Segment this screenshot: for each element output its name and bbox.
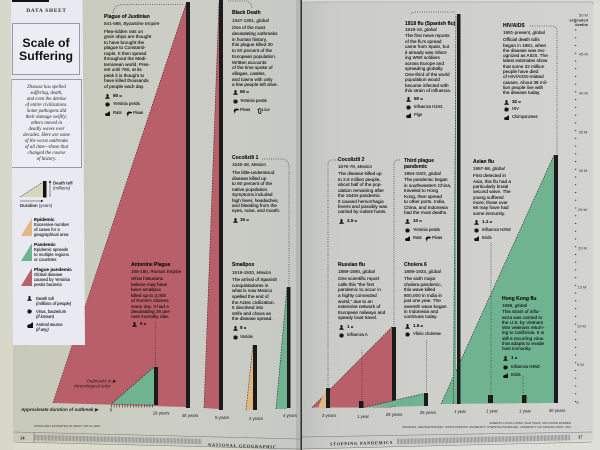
outbreak: Third plague pandemic: pandemic bbox=[404, 164, 427, 170]
duration labels: 16 years bbox=[153, 410, 169, 416]
legend: plague pandemic: Plague pandemic bbox=[34, 267, 72, 272]
outbreak: 1918 flu: Influenza H1N1 bbox=[414, 104, 443, 109]
outbreak: Cocoliztli 2: about half of the pop- bbox=[338, 182, 382, 187]
duration labels: 2 years bbox=[249, 416, 263, 421]
outbreak: Black Death: Fleas bbox=[240, 107, 250, 112]
outbreak: Cholera 6: 1.5 M bbox=[413, 323, 423, 328]
outbreak: Cholera 6: this wave killed bbox=[404, 287, 435, 292]
outbreak: Plague of Justinian bbox=[104, 14, 160, 117]
legend: epidemic: Epidemic bbox=[34, 217, 54, 222]
legend: how to read: Duration (years) bbox=[20, 203, 53, 208]
outbreak: Antonine Plague: Antonine Plague bbox=[131, 262, 170, 268]
outbreak: Black Death: and towns with only bbox=[232, 77, 272, 82]
outbreak: Black Death: One of the most bbox=[232, 25, 265, 30]
outbreak: Black Death: of the time spoke of bbox=[232, 65, 272, 70]
outbreak: HIV/AIDS: lion people live with bbox=[503, 85, 543, 90]
intro text: of the worst outbreaks bbox=[25, 139, 68, 144]
outbreak: Plague of Justinian: Yersinia pestis bbox=[113, 101, 140, 106]
outbreak: Cholera 6: The sixth major bbox=[404, 276, 436, 281]
outbreak: Russian flu: world," due to an bbox=[338, 299, 373, 304]
outbreak: Asian flu: more; those over bbox=[473, 200, 508, 205]
folio: right footer bbox=[302, 432, 592, 449]
y axis: estimated deaths: 5 M bbox=[577, 362, 584, 367]
outbreak: Third plague pandemic: 10 M bbox=[413, 218, 422, 223]
outbreak: HIV/AIDS: 1981-present, global bbox=[503, 30, 545, 35]
outbreak: Plague of Justinian: have killed thousands bbox=[104, 78, 149, 83]
outbreak: Cocoliztli 2: Cocoliztli 2 bbox=[338, 157, 364, 163]
outbreak: Smallpox: the disease spread. bbox=[232, 316, 273, 321]
outbreak: HIV/AIDS: Chimpanzees bbox=[512, 114, 538, 119]
outbreak: Cholera 6: just one year. The bbox=[404, 298, 441, 303]
outbreak: Smallpox: 8 M bbox=[240, 325, 246, 330]
outbreak: 1918 flu: this strain of influenza. bbox=[405, 88, 451, 93]
outbreak: Third plague pandemic: Yersinia pestis bbox=[413, 227, 440, 232]
y axis: estimated deaths: 30 M bbox=[578, 168, 587, 173]
y axis: estimated deaths: 40 M bbox=[579, 90, 588, 96]
outbreak: Asian flu: some immunity. bbox=[473, 211, 505, 216]
outbreak: Plague of Justinian: plague to Constanti- bbox=[104, 45, 146, 50]
folio: right footer: 37 bbox=[578, 434, 583, 440]
outbreak: Russian flu: 1889-1890, global bbox=[338, 269, 375, 274]
outbreak: Russian flu: calls this "the first bbox=[338, 282, 374, 287]
outbreak: Russian flu: European railways and bbox=[338, 310, 385, 315]
outbreak: HIV/AIDS: Official death tolls bbox=[503, 37, 540, 42]
outbreak: Russian flu: pandemic to occur in bbox=[338, 287, 381, 292]
triangle: Smallpox bbox=[246, 345, 257, 410]
legend: death toll icon: (millions of people) bbox=[36, 301, 71, 306]
outbreak: Russian flu: 1 M bbox=[347, 324, 353, 329]
outbreak: Russian flu: Russian flu bbox=[338, 262, 365, 268]
outbreak: Cocoliztli 2: ulation remaining after bbox=[338, 188, 384, 193]
outbreak: Cholera 6 bbox=[404, 262, 447, 337]
outbreak: Smallpox: strife and chaos as bbox=[232, 311, 271, 316]
outbreak: Hong Kong flu bbox=[502, 296, 544, 378]
triangle: Cocoliztli 2 bbox=[318, 388, 330, 408]
outbreak: Asian flu: 1957-58, global bbox=[473, 166, 505, 171]
outbreak: Antonine Plague: of Rome's citizens bbox=[131, 298, 169, 303]
intro text bbox=[11, 79, 82, 168]
legend: death toll icon: Death toll bbox=[36, 296, 54, 301]
outbreak: Plague of Justinian: ent until 750, at its bbox=[104, 67, 142, 72]
outbreak: Cocoliztli 2: 1576-78, Mexico bbox=[338, 164, 372, 169]
outbreak: Asian flu: Birds bbox=[482, 235, 492, 240]
outbreak: Cocoliztli 2: 2.5 M bbox=[347, 218, 357, 223]
triangle: Antonine Plague bbox=[112, 367, 158, 405]
duration labels: 4 years bbox=[283, 413, 297, 418]
outbreak: Black Death bbox=[232, 10, 278, 114]
outbreak: Black Death: Black Death bbox=[232, 10, 261, 16]
outbreak: Plague of Justinian: Plague of Justinian bbox=[104, 14, 150, 20]
outbreak: Plague of Justinian: grain ships are thought bbox=[104, 34, 151, 39]
duration labels: 29 years bbox=[386, 412, 402, 417]
outbreak: Hong Kong flu: Hong Kong flu bbox=[502, 296, 536, 302]
outbreak: HIV/AIDS: causes. About 38 mil- bbox=[503, 80, 547, 85]
book gutter bbox=[296, 0, 302, 450]
outbreak: Plague of Justinian: throughout the Medi- bbox=[104, 56, 147, 61]
outbreak: Hong Kong flu: This strain of influ- bbox=[502, 309, 540, 314]
outbreak: 1918 flu: ing WWI soldiers bbox=[405, 55, 440, 60]
outbreak: Smallpox: the Aztec civilization. bbox=[232, 300, 275, 305]
outbreak: Asian flu: young suffered bbox=[473, 195, 504, 200]
y axis: estimated deaths: deaths bbox=[575, 22, 589, 27]
triangle: Cocoliztli 1 bbox=[276, 287, 290, 409]
outbreak: Hong Kong flu: enza was carried to bbox=[502, 315, 542, 320]
legend: animal icon: (if any) bbox=[36, 327, 49, 332]
outbreak: Black Death: devastating outbreaks bbox=[232, 31, 277, 36]
duration labels: 1 year bbox=[486, 408, 499, 414]
dotted connectors bbox=[113, 1, 557, 400]
outbreak: Cholera 6: 800,000 in India in bbox=[404, 293, 442, 298]
outbreak: HIV/AIDS: began in 1981, when bbox=[503, 43, 546, 48]
outbreak: Asian flu: second wave. The bbox=[473, 189, 511, 194]
outbreak: HIV/AIDS: of HIV/AIDS-related bbox=[503, 74, 544, 79]
outbreak: Plague of Justinian: 50 M bbox=[113, 93, 122, 98]
outbreak: Antonine Plague: 165-180, Roman Empire bbox=[131, 269, 181, 274]
outbreak: Asian flu: First detected in bbox=[473, 173, 506, 178]
outbreak: Cocoliztli 2 bbox=[338, 157, 388, 224]
outbreak: Cocoliztli 1: native population. bbox=[232, 187, 268, 192]
intro text: of entire civilizations. bbox=[25, 103, 68, 108]
y axis: estimated deaths: 45 M bbox=[579, 52, 588, 56]
outbreak: Cholera 6: continues today. bbox=[404, 314, 437, 319]
duration labels: 5 years bbox=[215, 415, 229, 420]
triangle: Russian flu bbox=[359, 401, 364, 408]
duration ruler bbox=[111, 404, 155, 408]
outbreak: Smallpox: The arrival of Spanish bbox=[232, 277, 277, 282]
title: Suffering bbox=[19, 49, 73, 63]
folio: left footer: NATIONAL GEOGRAPHIC bbox=[208, 442, 277, 449]
outbreak: Asian flu: Influenza H2N2 bbox=[482, 227, 511, 232]
legend: how to read: Death toll bbox=[53, 180, 73, 186]
outbreak: Cocoliztli 1 bbox=[232, 155, 280, 223]
outbreak: HIV/AIDS: HIV bbox=[512, 106, 519, 111]
outbreak: Hong Kong flu: the U.S. by Vietnam bbox=[502, 320, 543, 325]
outbreak: Third plague pandemic bbox=[404, 158, 451, 242]
outbreak: HIV/AIDS: 32 M bbox=[512, 99, 521, 104]
outbreak: Cocoliztli 2: fevers and possibly was bbox=[338, 204, 387, 209]
intro text: changed the course bbox=[27, 151, 66, 156]
source notes bbox=[34, 420, 571, 429]
outbreak: Black Death: villages, castles, bbox=[232, 71, 266, 76]
outbreak: Cocoliztli 1: to 80 percent of the bbox=[232, 181, 272, 186]
outbreak: Cocoliztli 1: 15 M bbox=[240, 217, 249, 222]
outbreak: Black Death: a few people left alive. bbox=[232, 82, 278, 87]
outbreak: Cocoliztli 2: to 2.5 million people, bbox=[338, 177, 381, 182]
intro text: their damage swiftly; bbox=[26, 115, 67, 120]
y axis: estimated deaths: 0 bbox=[576, 400, 580, 405]
outbreak: Cocoliztli 1: and bleeding from the bbox=[232, 203, 277, 208]
outbreak: Third plague pandemic: Fleas bbox=[432, 235, 442, 240]
outbreak: Smallpox: Smallpox bbox=[232, 262, 254, 268]
outbreak: 1918 flu: population would bbox=[405, 77, 440, 82]
outbreak: Antonine Plague: What historians bbox=[131, 276, 163, 281]
intro text: suffering, death, bbox=[31, 91, 62, 96]
duration labels bbox=[110, 408, 565, 421]
duration labels: 1 year bbox=[357, 414, 370, 419]
outbreak: HIV/AIDS: ognized as AIDS. The bbox=[503, 53, 548, 58]
triangle: Cholera 6 bbox=[364, 393, 428, 408]
folio: left footer: 14 bbox=[20, 436, 25, 440]
kicker: data sheet: DATA SHEET bbox=[26, 8, 67, 14]
y axis: estimated deaths: 35 M bbox=[578, 130, 587, 134]
outbreak: Russian flu bbox=[338, 262, 385, 338]
legend: plague pandemic bbox=[21, 267, 72, 287]
bar: Hong Kong flu bbox=[522, 395, 526, 403]
outbreak: Cocoliztli 1: disease killed up bbox=[232, 176, 266, 181]
outbreak: Hong Kong flu: host immunity. bbox=[502, 346, 532, 351]
intro text: of all time—those that bbox=[25, 145, 68, 150]
bar: Asian flu bbox=[488, 395, 493, 403]
duration labels: 0 bbox=[110, 408, 113, 412]
outbreak: Cholera 6: Cholera 6 bbox=[404, 262, 427, 268]
outbreak: Third plague pandemic: in southwestern China, bbox=[404, 183, 451, 188]
outbreak: 1918 flu: The first news reports bbox=[405, 33, 450, 38]
outbreak: Smallpox: conquistadores in bbox=[232, 283, 268, 288]
outbreak: Hong Kong flu: 1968, global bbox=[502, 303, 527, 308]
title bbox=[12, 23, 80, 75]
source notes: SCHOLARLY ESTIMATES OF DEATH TOLLS VARY. bbox=[34, 424, 101, 428]
outbreak: Black Death: to 50 percent of the bbox=[232, 48, 272, 53]
outbreak: Smallpox: what is now Mexico bbox=[232, 288, 272, 293]
outbreak: Plague of Justinian: 541-588, Byzantine Empire bbox=[104, 20, 159, 26]
outbreak: Smallpox: spelled the end of bbox=[232, 294, 269, 299]
outbreak: HIV/AIDS: HIV/AIDS bbox=[503, 23, 525, 29]
outbreak: Asian flu: 1.1 M bbox=[482, 219, 492, 224]
outbreak: 1918 flu bbox=[405, 21, 456, 118]
intro text: and even the demise bbox=[27, 97, 66, 102]
outbreak: 1918 flu: 1918-19, global bbox=[405, 27, 437, 32]
outbreak: Cocoliztli 1: high fever, headaches, bbox=[232, 198, 279, 203]
outbreak: 1918 flu: become infected with bbox=[405, 83, 449, 88]
outbreak: Plague of Justinian: terranean world. Pres- bbox=[104, 62, 150, 67]
outbreak: Antonine Plague bbox=[131, 262, 181, 327]
legend: epidemic: of cases for a bbox=[34, 227, 60, 232]
outbreak: Black Death: Lice bbox=[262, 107, 270, 112]
y axis: estimated deaths: 25 M bbox=[578, 207, 587, 212]
outbreak: HIV/AIDS: that some 32 million bbox=[503, 64, 544, 69]
intro text: of history. bbox=[37, 157, 56, 162]
outbreak: Cocoliztli 1: Cocoliztli 1 bbox=[232, 155, 258, 161]
outbreak: Cocoliztli 1: 1545-48, Mexico bbox=[232, 162, 266, 167]
annotation: chronological order bbox=[74, 378, 117, 388]
duration labels: 25 years bbox=[420, 410, 436, 415]
outbreak: Plague of Justinian: Flea-ridden rats on bbox=[104, 29, 143, 34]
outbreak: Third plague pandemic: The pandemic began bbox=[404, 177, 448, 182]
intro text: decades. Here are some bbox=[23, 133, 70, 138]
outbreak: Cocoliztli 2: carried by rodent hosts. bbox=[338, 209, 386, 214]
outbreak: Black Death: Written accounts bbox=[232, 60, 266, 65]
outbreak: HIV/AIDS bbox=[503, 23, 548, 120]
outbreak: Hong Kong flu: Influenza H3N2 bbox=[511, 364, 540, 369]
duration labels: 1 year bbox=[454, 409, 467, 414]
outbreak: Black Death: 1347-1351, global bbox=[232, 18, 269, 23]
y axis: estimated deaths: 50 M bbox=[579, 12, 588, 18]
outbreak: Antonine Plague: believe may have bbox=[131, 282, 167, 287]
outbreak: Plague of Justinian: to have brought the bbox=[104, 40, 144, 45]
outbreak: Asian flu: Asian flu bbox=[473, 159, 494, 165]
outbreak: Antonine Plague: killed up to 2,000 bbox=[131, 293, 166, 298]
y axis: estimated deaths: 20 M bbox=[578, 246, 587, 250]
outbreak: Hong Kong flu: that adapts to evade bbox=[502, 341, 544, 346]
outbreak: HIV/AIDS: the disease was rec- bbox=[503, 48, 546, 53]
legend: animal icon bbox=[27, 322, 63, 332]
outbreak: Cholera 6: 1899-1923, global bbox=[404, 269, 441, 274]
annotation: chronological order: chronological order bbox=[74, 384, 112, 388]
outbreak: Cholera 6: cholera pandemic, bbox=[404, 282, 442, 287]
outbreak: Russian flu: extensive network of bbox=[338, 304, 380, 309]
outbreak: Hong Kong flu: still a recurring virus bbox=[502, 336, 543, 341]
outbreak: 1918 flu: spreading globally. bbox=[405, 66, 443, 71]
triangle: Third plague pandemic bbox=[312, 327, 396, 408]
outbreak: Smallpox: It devolved into bbox=[232, 305, 263, 310]
outbreak: Antonine Plague: cent mortality rate. bbox=[131, 314, 169, 319]
duration labels: 1 year bbox=[519, 408, 532, 414]
legend: epidemic bbox=[21, 217, 70, 237]
outbreak: HIV/AIDS: people have died bbox=[503, 69, 538, 74]
outbreak: Plague of Justinian: Rats bbox=[113, 110, 122, 115]
legend: pandemic: to multiple regions bbox=[34, 252, 69, 257]
outbreak: Asian flu: particularly brutal bbox=[473, 184, 508, 189]
outbreak: 1918 flu: it already was infect- bbox=[405, 50, 447, 55]
legend: epidemic: Excessive number bbox=[34, 222, 69, 227]
outbreak: Antonine Plague: devastating 25 per- bbox=[131, 309, 171, 314]
outbreak: Hong Kong flu: ing to California. It is bbox=[502, 330, 544, 335]
legend: virus icon: (if known) bbox=[36, 314, 54, 319]
outbreak: 1918 flu: 50 M bbox=[414, 96, 423, 101]
outbreak: Third plague pandemic: China, and Indonesia bbox=[404, 205, 448, 210]
outbreak: 1918 flu: One-third of the world bbox=[405, 72, 450, 77]
legend: plague pandemic: caused by Yersinia bbox=[34, 277, 70, 282]
y axis: estimated deaths: estimated bbox=[569, 18, 589, 22]
source notes: SOURCES: GRAHAM MOONEY, JOHNS HOPKINS UNIVERSITY; CHRISTIAN MCMILLEN, UNIVERSITY OF VIRGINIA; WHO; CDC bbox=[402, 425, 571, 429]
intro text: Disease has spelled bbox=[27, 84, 66, 90]
legend: pandemic: Pandemic bbox=[34, 242, 56, 247]
duration labels: 40 years bbox=[549, 408, 565, 413]
folio: left footer bbox=[14, 432, 300, 449]
outbreak: Smallpox: Variola bbox=[240, 334, 253, 339]
y axis: estimated deaths: 10 M bbox=[577, 324, 586, 328]
outbreak: Cocoliztli 2: The disease killed up bbox=[338, 171, 382, 176]
outbreak: 1918 flu: came from Spain, but bbox=[405, 44, 449, 49]
y axis: estimated deaths bbox=[569, 12, 589, 405]
outbreak: Antonine Plague: been smallpox bbox=[131, 287, 161, 292]
outbreak: Cocoliztli 1: Symptoms included bbox=[232, 192, 272, 197]
outbreak: HIV/AIDS: latest estimates show bbox=[503, 58, 547, 63]
outbreak: Russian flu: Influenza A bbox=[347, 332, 368, 337]
axis caption: Approximate duration of outbreak ▶ bbox=[20, 407, 99, 412]
outbreak: Third plague pandemic: Rats bbox=[413, 235, 422, 240]
outbreak: Black Death: European population. bbox=[232, 54, 276, 59]
intro text: others moved in bbox=[31, 121, 62, 126]
duration labels: 3 years bbox=[322, 413, 336, 418]
legend: plague pandemic: Global disease bbox=[34, 272, 62, 277]
legend: virus icon: Virus, bacterium bbox=[36, 309, 66, 314]
legend: pandemic: or countries bbox=[34, 257, 56, 262]
outbreak: Cocoliztli 2: It caused hemorrhagic bbox=[338, 199, 384, 204]
triangle: 1918 flu bbox=[453, 14, 460, 404]
outbreak: Cholera 6: seventh wave began bbox=[404, 304, 447, 309]
legend: how to read bbox=[20, 180, 73, 208]
source notes: ALBERTO LUCAS LÓPEZ, NGM STAFF; ANYA HOPE BURDEN bbox=[489, 420, 571, 425]
triangle: Plague of Justinian bbox=[53, 2, 190, 408]
outbreak: Cholera 6: Vibrio cholerae bbox=[413, 331, 441, 336]
outbreak: Cocoliztli 1: eyes, nose, and mouth. bbox=[232, 208, 280, 213]
triangle: HIV/AIDS bbox=[441, 155, 558, 404]
outbreak: Asian flu bbox=[473, 159, 511, 241]
outbreak: 1918 flu: across Europe and bbox=[405, 61, 444, 66]
outbreak: Black Death: 50 M bbox=[240, 89, 249, 94]
outbreak: Third plague pandemic: had the most deaths. bbox=[404, 210, 447, 215]
legend: virus icon bbox=[27, 309, 66, 319]
legend: pandemic bbox=[21, 242, 69, 262]
legend: pandemic: Epidemic spreads bbox=[34, 247, 68, 252]
outbreak: Third plague pandemic: traveled to Hong bbox=[404, 188, 438, 193]
outbreak: Cocoliztli 1: The little-understood bbox=[232, 170, 274, 175]
outbreak: 1918 flu: Pigs bbox=[414, 112, 422, 117]
y axis: estimated deaths: 15 M bbox=[578, 284, 586, 290]
outbreak: Smallpox bbox=[232, 262, 277, 340]
outbreak: Plague of Justinian: peak it is thought to bbox=[104, 73, 144, 78]
folio: right footer: STOPPING PANDEMICS bbox=[330, 440, 393, 446]
outbreak: Third plague pandemic: Third plague bbox=[404, 158, 434, 164]
outbreak: Antonine Plague: every day. It had a bbox=[131, 304, 169, 309]
outbreak: Smallpox: 1519-1520, Mexico bbox=[232, 270, 271, 275]
outbreak: Plague of Justinian: Fleas bbox=[133, 110, 143, 115]
outbreak: Antonine Plague: 5 M bbox=[140, 321, 146, 326]
outbreak: Cholera 6: in Indonesia and bbox=[404, 309, 438, 314]
legend: animal icon: Animal source bbox=[36, 322, 63, 327]
outbreak: Asian flu: 65 may have had bbox=[473, 205, 509, 210]
intro text: deadly waves over bbox=[28, 127, 65, 132]
outbreak: 1918 flu: 1918 flu (Spanish flu) bbox=[405, 21, 455, 27]
outbreak: Hong Kong flu: Birds bbox=[511, 372, 521, 377]
outbreak: Cocoliztli 2: the 1540s pandemic. bbox=[338, 193, 381, 198]
outbreak: Hong Kong flu: War veterans return- bbox=[502, 325, 544, 330]
outbreak: Russian flu: One scientific report bbox=[338, 276, 379, 281]
outbreak: Third plague pandemic: Kong, then spread bbox=[404, 194, 442, 199]
legend: death toll icon bbox=[27, 296, 71, 306]
annotation: chronological order: Outbreaks in ▶ bbox=[86, 378, 117, 384]
legend: how to read: (millions) bbox=[53, 186, 71, 190]
outbreak: Plague of Justinian: nople. It then spread bbox=[104, 51, 146, 56]
title: Scale of bbox=[22, 36, 70, 50]
duration labels: 48 years bbox=[182, 413, 198, 418]
outbreak: Russian flu: a highly connected bbox=[338, 293, 377, 298]
outbreak: HIV/AIDS: the disease today. bbox=[503, 90, 540, 95]
outbreak: Asian flu: Asia, this flu had a bbox=[473, 179, 511, 184]
outbreak: Black Death: in human history, bbox=[232, 37, 267, 42]
outbreak: Third plague pandemic: to other ports. India, bbox=[404, 199, 445, 204]
outbreak: Russian flu: speedy boat travel. bbox=[338, 315, 377, 320]
outbreak: Hong Kong flu: 1 M bbox=[511, 355, 517, 360]
outbreak: Black Death: this plague killed 30 bbox=[232, 42, 273, 47]
triangle: Black Death bbox=[204, 0, 223, 410]
panel: data sheet sidebar bbox=[11, 0, 85, 345]
outbreak: Plague of Justinian: of people each day. bbox=[104, 84, 144, 89]
legend: plague pandemic: pestis bacteria bbox=[34, 282, 62, 287]
outbreak: Black Death: Yersinia pestis bbox=[240, 98, 267, 103]
outbreak: Third plague pandemic: 1894-1922, global bbox=[404, 171, 441, 176]
legend: epidemic: geographical area bbox=[34, 232, 68, 237]
intro text: Some pathogens did bbox=[27, 109, 66, 114]
outbreak: 1918 flu: of the flu's spread bbox=[405, 39, 442, 44]
